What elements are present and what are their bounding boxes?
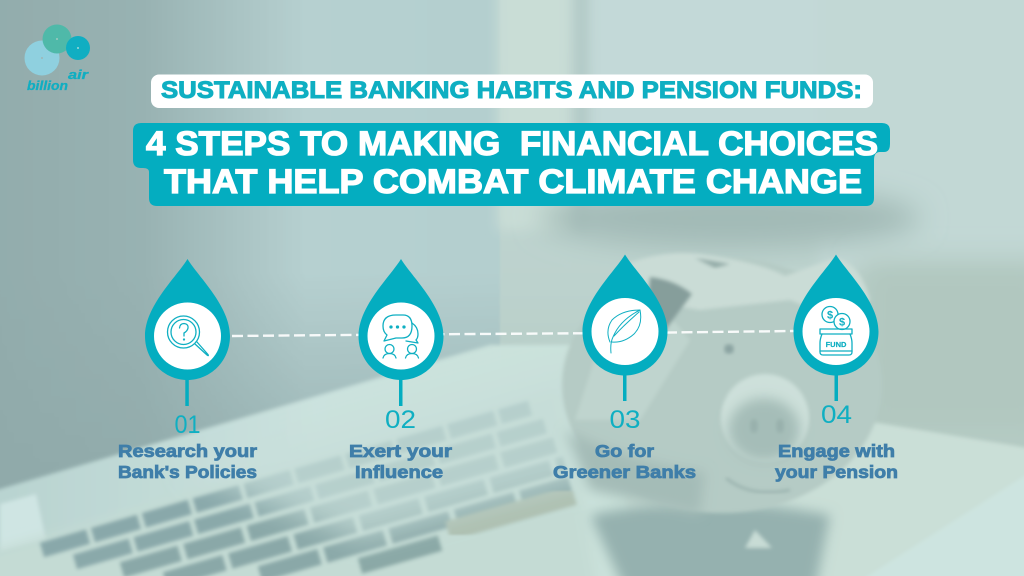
step 4: engage with your pension: 04: [821, 401, 852, 429]
step 4: engage with your pension: your Pension: [775, 462, 898, 482]
icon: leaf: [608, 310, 641, 353]
keyboard wash: top rows fade out of focus: [180, 360, 620, 540]
step 1: research your bank's policies: Research your: [118, 441, 257, 461]
logo: billion air: air: [68, 67, 89, 82]
piggy bank: [562, 253, 1024, 576]
table surface: [500, 420, 1024, 576]
logo: billion air: [24, 24, 90, 93]
step 2: exert your influence: Exert your: [349, 441, 452, 461]
step 4: engage with your pension: $: [839, 316, 845, 328]
dashed connector line: [232, 331, 795, 336]
keyboard rows: [42, 408, 570, 576]
step 4: engage with your pension: $: [827, 310, 833, 322]
icon: fund jar with coins: [820, 306, 852, 355]
step 1: research your bank's policies: 01: [174, 411, 200, 439]
title pill: THAT HELP COMBAT CLIMATE CHANGE: [164, 163, 862, 201]
step 4: engage with your pension: Engage with: [778, 441, 895, 461]
step 1: research your bank's policies: [118, 259, 257, 482]
step 2: exert your influence: Influence: [355, 462, 443, 482]
step 1: research your bank's policies: Bank's Policies: [118, 462, 257, 482]
icon: two people with speech bubbles: [383, 315, 418, 358]
step 3: go for greener banks: Go for: [595, 441, 654, 461]
step 3: go for greener banks: Greener Banks: [553, 462, 696, 482]
icon: magnifying glass with question mark: [168, 316, 208, 356]
step 3: go for greener banks: [553, 254, 696, 482]
title pill: 4 STEPS TO MAKING FINANCIAL CHOICES: [146, 125, 878, 163]
step 2: exert your influence: 02: [385, 406, 416, 434]
title pill: [133, 123, 890, 206]
step 4: engage with your pension: FUND: [826, 340, 847, 349]
logo: billion air: billion: [27, 78, 68, 93]
step 2: exert your influence: [349, 259, 452, 482]
subtitle pill: SUSTAINABLE BANKING HABITS AND PENSION FUNDS:: [161, 77, 862, 104]
step 3: go for greener banks: 03: [610, 406, 640, 434]
laptop deck: [0, 345, 640, 576]
step 4: engage with your pension: [775, 254, 898, 482]
